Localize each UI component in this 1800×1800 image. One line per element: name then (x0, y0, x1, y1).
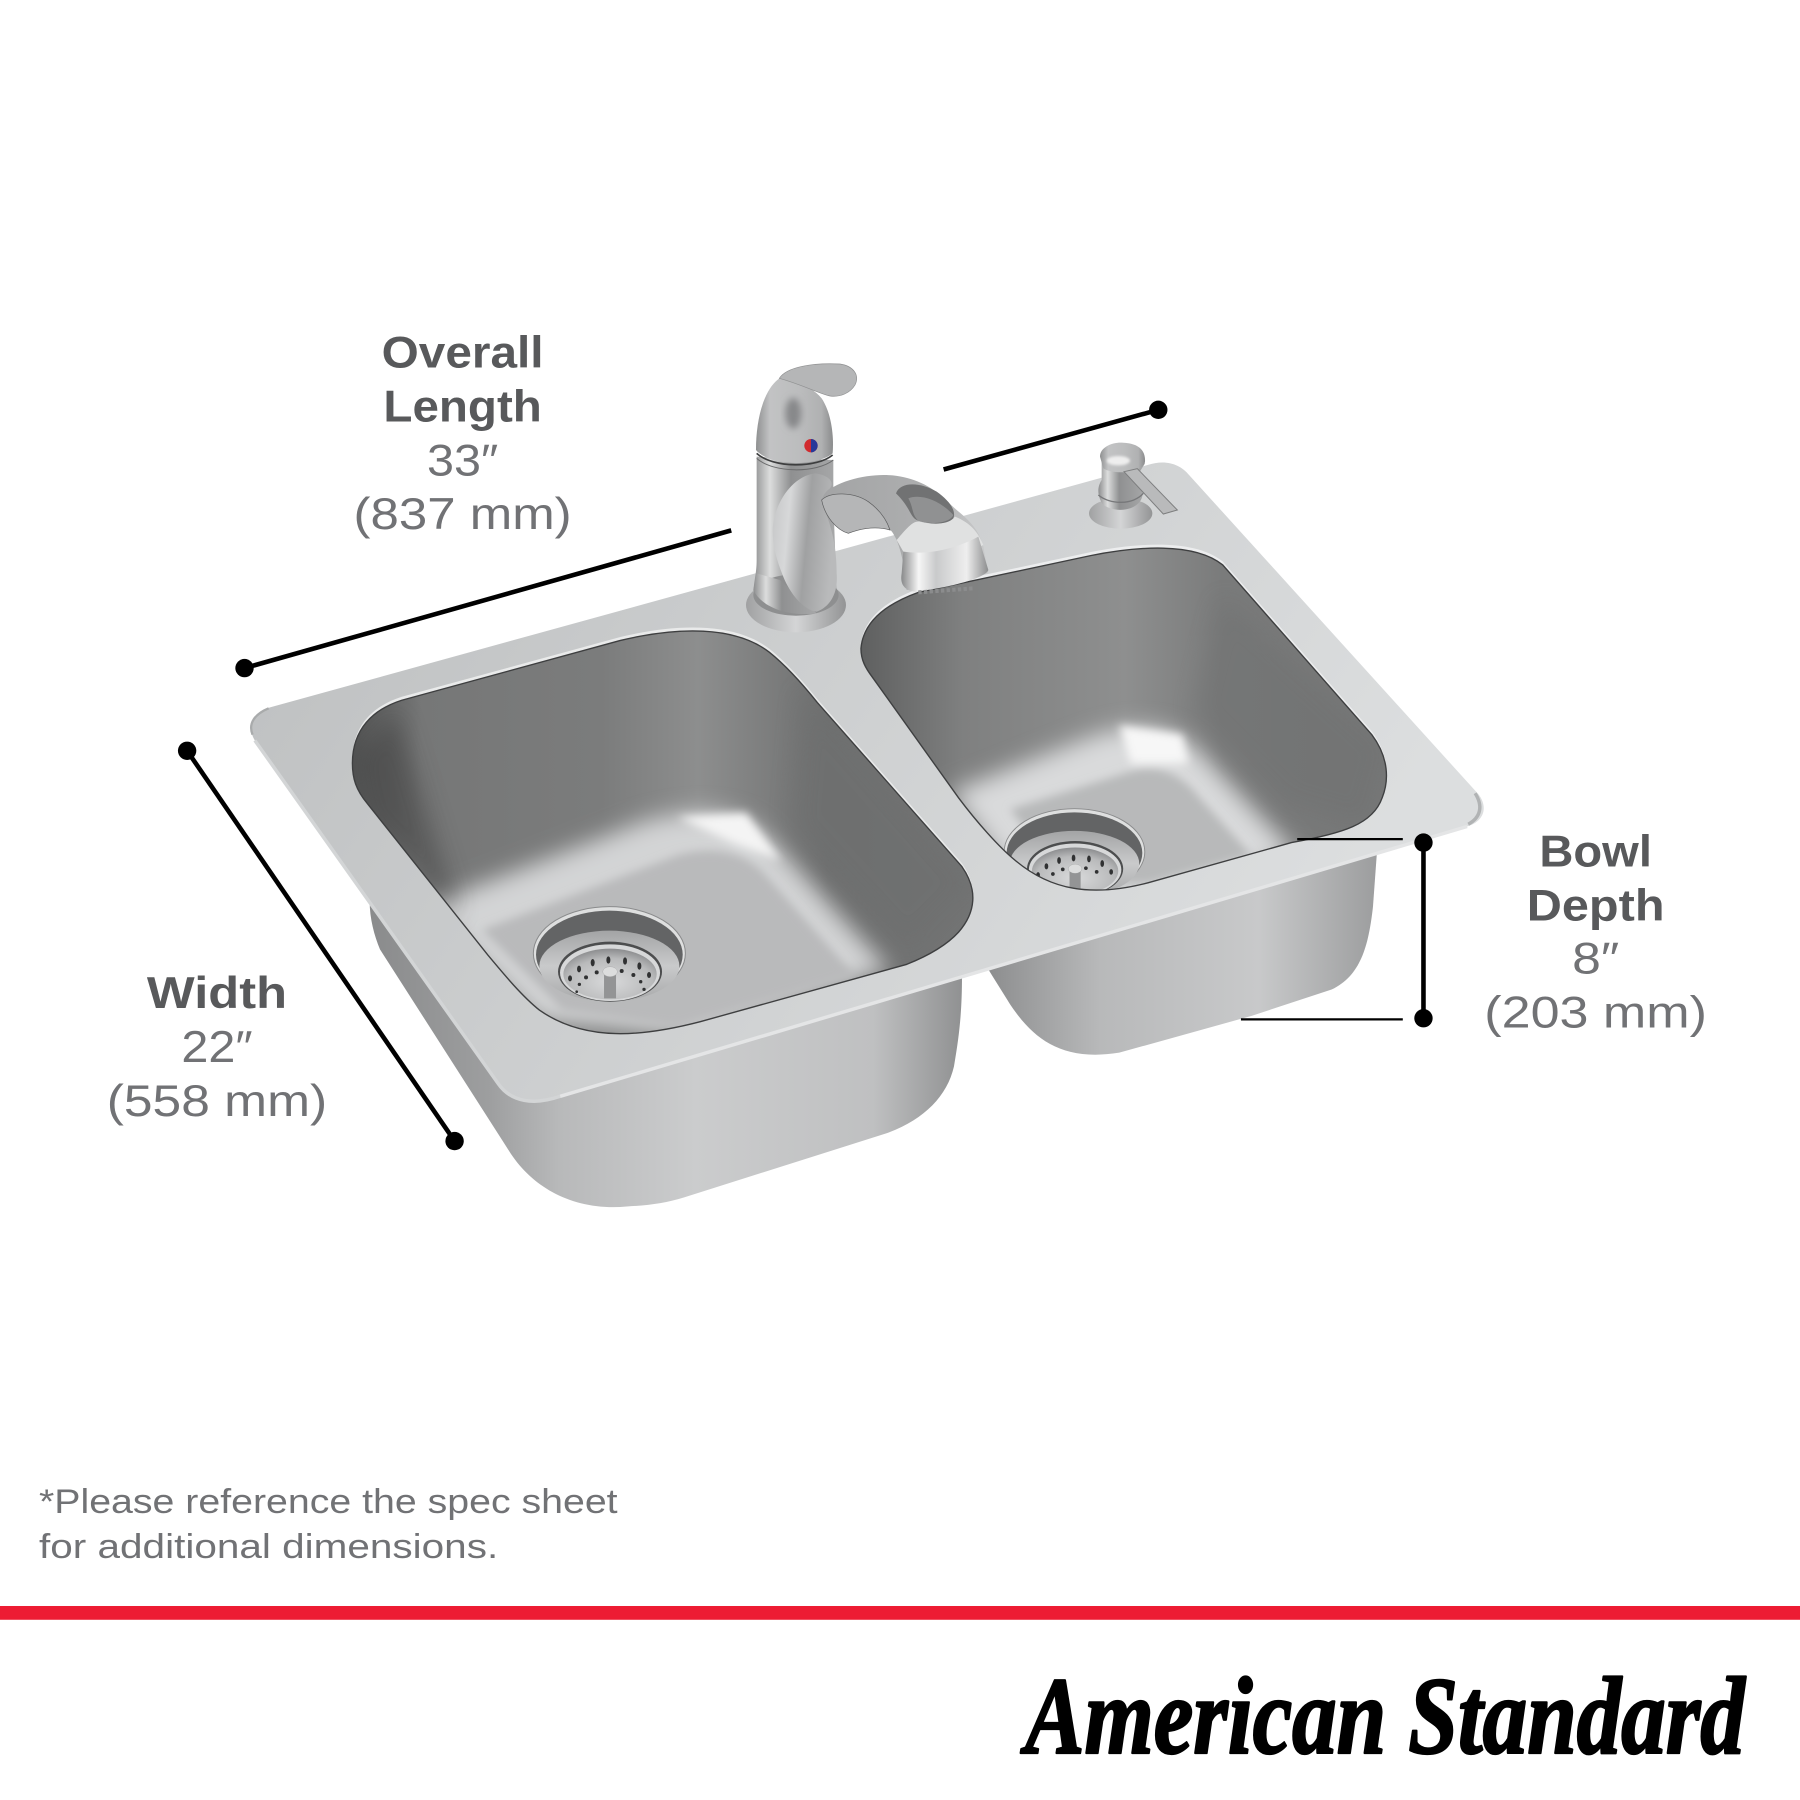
sink illustration (251, 364, 1484, 1207)
left drain (533, 907, 685, 1002)
spray head (897, 517, 983, 556)
label: overall length: 33″ (427, 435, 498, 485)
label: overall length: Length (383, 381, 542, 431)
faucet base (746, 573, 846, 632)
faucet handle (779, 364, 857, 396)
right bowl floor (951, 727, 1297, 907)
pull-out spout (773, 473, 837, 612)
label: width: 22″ (181, 1022, 253, 1072)
right bowl underside (982, 844, 1378, 1055)
deck (251, 462, 1484, 1101)
hose arch (822, 475, 988, 590)
faucet (746, 364, 988, 632)
label: width: Width (147, 968, 287, 1018)
dimension: width (178, 742, 464, 1150)
label: overall length: Overall (382, 327, 544, 377)
faucet stem (753, 457, 837, 593)
label: width: (558 mm) (107, 1076, 327, 1126)
footnote (39, 1483, 618, 1566)
left bowl underside (370, 901, 962, 1207)
label: width (107, 968, 327, 1126)
label: bowl depth: Bowl (1539, 827, 1652, 877)
label: bowl depth: (203 mm) (1484, 987, 1707, 1037)
footnote: *Please reference the spec sheet (39, 1483, 618, 1521)
right drain (1004, 809, 1145, 897)
label: bowl depth: 8″ (1572, 933, 1619, 983)
dimension: bowl depth (1241, 833, 1433, 1027)
dimension: overall length (235, 401, 1167, 677)
soap dispenser (1089, 443, 1177, 529)
temperature indicator (804, 439, 818, 452)
label: overall length (354, 327, 572, 539)
right bowl (855, 540, 1395, 907)
footnote: for additional dimensions. (39, 1528, 498, 1566)
left bowl floor (422, 812, 890, 1033)
label: bowl depth (1484, 827, 1707, 1037)
left bowl (344, 620, 987, 1056)
label: overall length: (837 mm) (354, 489, 572, 539)
red divider (0, 1606, 1800, 1620)
faucet dome (756, 378, 833, 463)
label: bowl depth: Depth (1527, 881, 1665, 931)
